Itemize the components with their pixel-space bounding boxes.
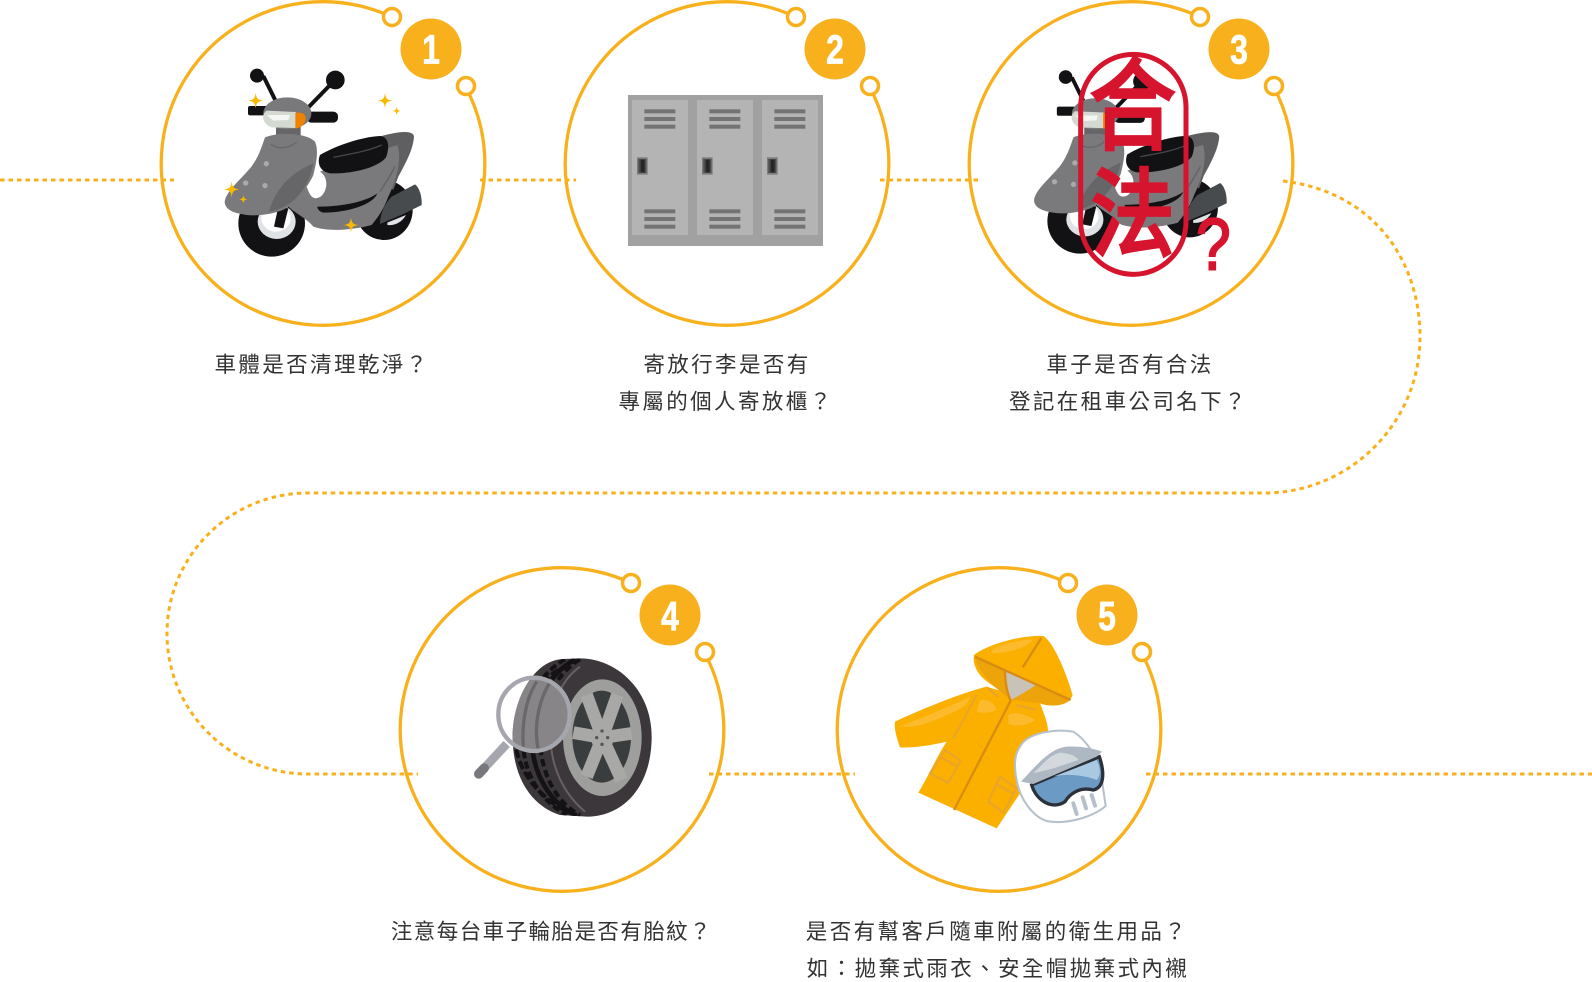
circle ring 3: [969, 2, 1293, 325]
number badge 5: [1076, 584, 1138, 646]
caption 5: 是否有幫客戶隨車附屬的衛生用品？: [806, 920, 1188, 944]
panel: step 4: [391, 568, 724, 944]
icon: clean scooter: [224, 69, 422, 257]
number badge 3: 3: [1230, 27, 1248, 72]
caption 2: 專屬的個人寄放櫃？: [618, 390, 834, 414]
icon: scooter with legal stamp: ?: [1196, 204, 1231, 285]
panel: step 2: [565, 2, 889, 414]
circle ring 1: [161, 2, 485, 325]
icon: scooter with legal stamp: 法: [1091, 138, 1175, 276]
circle ring 2: [565, 2, 889, 325]
number badge 2: [804, 18, 866, 80]
panel: step 5: [806, 568, 1189, 981]
number badge 1: 1: [422, 27, 440, 72]
caption 1: 車體是否清理乾淨？: [214, 353, 430, 377]
icon: raincoat and helmet: [895, 636, 1106, 828]
number badge 4: 4: [661, 593, 679, 639]
caption 3: 登記在租車公司名下？: [1009, 390, 1248, 414]
caption 3: 車子是否有合法: [1046, 353, 1214, 377]
icon: scooter with legal stamp: 合: [1090, 26, 1176, 171]
caption 5: 如：拋棄式雨衣、安全帽拋棄式內襯: [807, 957, 1189, 981]
icon: scooter with legal stamp: [1034, 26, 1231, 285]
icon: tyre with magnifier: [479, 658, 652, 817]
caption 2: [618, 353, 834, 414]
circle ring 5: [837, 568, 1161, 891]
circle ring 4: [400, 568, 724, 891]
number badge 2: 2: [826, 27, 844, 72]
caption 4: 注意每台車子輪胎是否有胎紋？: [391, 920, 712, 944]
caption 3: [1009, 353, 1248, 414]
number badge 4: [640, 584, 700, 646]
caption 5: [806, 920, 1189, 981]
number badge 5: 5: [1098, 593, 1116, 639]
panel: step 3: [969, 2, 1293, 414]
dotted route line: [0, 180, 1592, 774]
icon: lockers: [628, 95, 823, 246]
caption 2: 寄放行李是否有: [643, 353, 811, 377]
panel: step 1: [161, 2, 485, 377]
number badge 3: [1208, 18, 1270, 80]
number badge 1: [400, 18, 462, 80]
